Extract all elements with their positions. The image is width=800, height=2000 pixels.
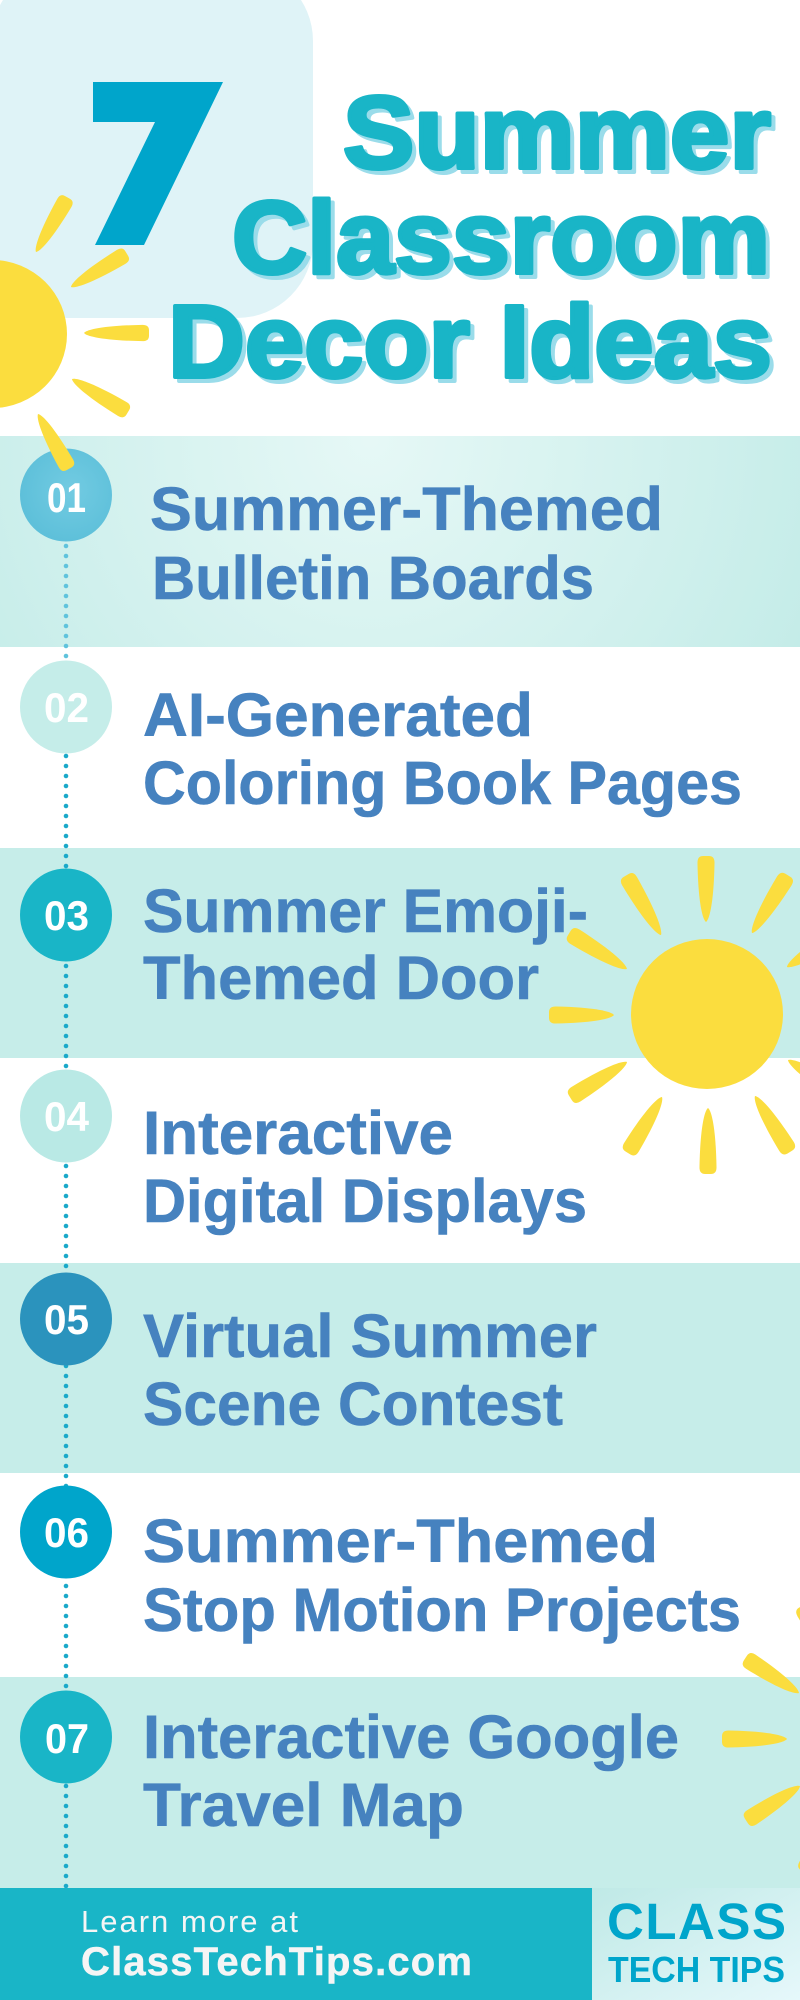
title shadow: Classroom	[236, 184, 774, 299]
step 6	[20, 1486, 741, 1644]
footer bar	[0, 1888, 592, 2000]
step text	[143, 1703, 679, 1839]
number 04: 04	[44, 1093, 90, 1140]
step text	[143, 1099, 587, 1235]
icon: big sun right	[549, 856, 800, 1174]
number 06: 06	[44, 1509, 89, 1556]
step text: Summer Emoji-	[143, 877, 588, 945]
dotted timeline	[64, 546, 68, 1888]
number badge 05	[20, 1272, 112, 1366]
number badge 07	[20, 1690, 112, 1784]
step text: AI-Generated	[143, 681, 533, 749]
step text	[143, 681, 742, 817]
number badge 01	[20, 448, 112, 542]
step 7	[20, 1690, 679, 1839]
step text: Interactive	[143, 1099, 453, 1167]
icon: sun top-left	[0, 193, 149, 473]
step text: Stop Motion Projects	[143, 1576, 741, 1644]
number badge 02	[20, 660, 112, 754]
step text	[143, 1302, 597, 1438]
step text: Travel Map	[143, 1771, 464, 1839]
step text: Summer-Themed	[143, 1507, 658, 1575]
title shadow	[172, 79, 776, 403]
logo: TECH TIPS: TECH TIPS	[608, 1949, 785, 1990]
step text: Summer-Themed	[150, 475, 663, 543]
step text: Digital Displays	[143, 1167, 587, 1235]
logo panel	[592, 1888, 800, 2000]
step 5	[20, 1272, 597, 1438]
step text: Coloring Book Pages	[143, 749, 742, 817]
icon: sun rays bottom-right	[722, 1602, 800, 1876]
panel: row 1 band	[0, 436, 800, 647]
step text	[150, 475, 663, 612]
big number 7	[93, 82, 223, 245]
number 07: 07	[45, 1715, 89, 1762]
number 02: 02	[44, 684, 89, 731]
step text: Bulletin Boards	[152, 544, 594, 612]
logo: CLASS: CLASS	[607, 1893, 786, 1950]
title text: Decor Ideas	[168, 284, 772, 399]
number badge 06	[20, 1486, 112, 1578]
title shadow: Decor Ideas	[172, 288, 776, 403]
step text: Interactive Google	[143, 1703, 679, 1771]
step text: Themed Door	[143, 944, 539, 1012]
number badge 03	[20, 868, 112, 962]
title text: Summer	[343, 75, 771, 190]
number 05: 05	[44, 1296, 89, 1343]
title	[168, 75, 776, 403]
step text	[143, 877, 588, 1012]
number 03: 03	[44, 892, 89, 939]
step 4	[20, 1070, 587, 1235]
step text	[143, 1507, 741, 1644]
step text: Scene Contest	[143, 1370, 563, 1438]
title text: Classroom	[232, 180, 770, 295]
panel: title background	[0, 0, 313, 318]
step 1	[20, 448, 663, 612]
panel: row 3 band	[0, 848, 800, 1058]
step text: Virtual Summer	[143, 1302, 597, 1370]
number badge 04	[20, 1070, 112, 1162]
step 3	[20, 868, 588, 1012]
panel: row 7 band	[0, 1677, 800, 1888]
step 2	[20, 660, 742, 817]
panel: row 5 band	[0, 1263, 800, 1473]
number 01: 01	[47, 474, 86, 521]
title shadow: Summer	[347, 79, 775, 194]
title text	[168, 75, 772, 399]
footer text: website: ClassTechTips.com	[81, 1940, 472, 1984]
footer text: learn more: Learn more at	[81, 1904, 298, 1939]
